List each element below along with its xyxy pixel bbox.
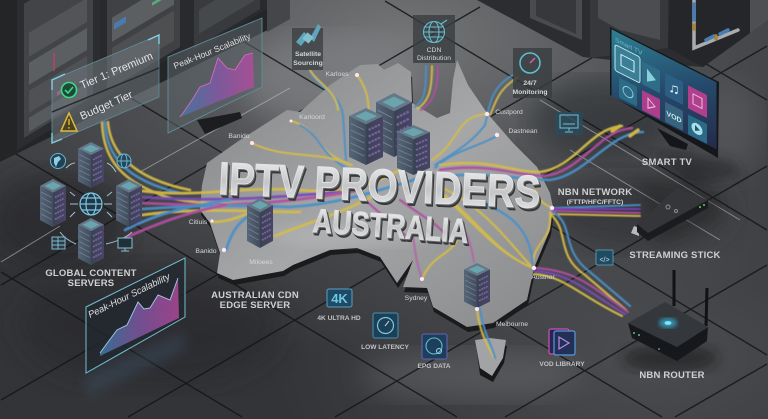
card: satellite sourcing: Satellite: [295, 51, 321, 58]
icon: central globe: [80, 193, 102, 215]
icon: data table: [52, 237, 65, 249]
label: streaming stick: STREAMING STICK: [629, 250, 721, 261]
tier labels: [78, 50, 155, 123]
icon: satellite: [296, 24, 321, 46]
heading: Australian CDN edge server: AUSTRALIAN CDN: [211, 290, 299, 301]
icon: 4K ultra HD: 4K ULTRA HD: [317, 315, 361, 322]
map place names: Austnor: [531, 274, 555, 281]
servers: central cluster: [349, 93, 430, 175]
chart: peak-hour scalability, upper: Peak-Hour Scalability: [172, 31, 253, 71]
streaming stick: [631, 180, 720, 245]
card: 24/7 monitoring: 24/7: [523, 80, 537, 87]
TV screen: ♫: [668, 78, 680, 100]
chart: peak-hour scalability, upper: [168, 18, 262, 134]
icon: EPG data: EPG DATA: [417, 363, 451, 370]
icon: code window: </>: [599, 257, 610, 264]
map place names: Custpord: [495, 109, 523, 116]
icon: small globe: [117, 154, 131, 168]
map place names: Citiuis: [189, 219, 208, 226]
icon: network monitor: [555, 112, 583, 135]
label: NBN network: NBN NETWORK: [558, 187, 632, 198]
map: Australia: [200, 60, 554, 382]
label: smart TV: SMART TV: [642, 157, 693, 168]
tier labels: Budget Tier: [78, 89, 135, 123]
cables: map to smart TV: [440, 126, 643, 180]
label: NBN network: [558, 187, 632, 206]
cables: top icons to servers: [252, 66, 517, 170]
map place names: Karloes: [325, 71, 349, 78]
map place names: Karloord: [299, 114, 325, 121]
heading: global content servers: SERVERS: [68, 278, 114, 289]
title: AUSTRALIA: [311, 202, 470, 251]
data cables: [102, 66, 643, 358]
card: satellite sourcing: Sourcing: [293, 60, 323, 67]
global content servers cluster: [40, 142, 142, 265]
map place names: Melbourne: [496, 321, 528, 328]
card: 24/7 monitoring: [512, 48, 552, 98]
cables: NBN node to streaming stick: [533, 190, 640, 268]
heading: global content servers: GLOBAL CONTENT: [45, 268, 137, 279]
icon: EPG data: [417, 334, 451, 370]
smart TV: [610, 27, 745, 185]
icon: code window: [596, 250, 613, 265]
map place names: Banido: [195, 248, 217, 255]
icon: arrows: [60, 163, 132, 244]
map place names: Banido: [228, 133, 250, 140]
server: Australian CDN edge: [247, 198, 273, 248]
TV screen: [612, 29, 716, 149]
card: CDN distribution: CDN: [427, 47, 441, 54]
icon: VOD library: VOD LIBRARY: [539, 361, 585, 368]
NBN router: [622, 270, 718, 372]
icon: green check: [62, 82, 76, 98]
cables: global servers across map: [125, 170, 420, 250]
chart: peak-hour scalability, lower: Peak-Hour Scalability: [86, 270, 173, 320]
icon: low latency: LOW LATENCY: [361, 344, 410, 351]
icon: VOD library: [539, 329, 585, 368]
icon: 4K ultra HD: 4K: [331, 291, 348, 306]
card: CDN distribution: [413, 15, 455, 63]
label: NBN router: NBN ROUTER: [639, 370, 705, 381]
card: 24/7 monitoring: Monitoring: [512, 89, 548, 96]
map place names: Dastnean: [508, 128, 538, 135]
icon: warning: [61, 113, 77, 131]
map place names: Miloees: [249, 259, 273, 266]
icon: pipes: [694, 0, 738, 48]
chart: peak-hour scalability, lower: [86, 258, 185, 398]
icon: 4K ultra HD: [317, 289, 361, 322]
panel: service tiers: [52, 35, 159, 143]
cables: tier panel to centre: [102, 122, 260, 204]
server racks: top left: [0, 0, 290, 162]
map place names: [189, 71, 555, 328]
icon: earth: [50, 154, 66, 168]
TV screen: VOD: [666, 109, 682, 125]
TV screen: Smart TV: [615, 37, 643, 57]
heading: Australian CDN edge server: EDGE SERVER: [220, 300, 290, 311]
Tasmania: [475, 338, 507, 382]
tier labels: Tier 1: Premium: [78, 50, 155, 92]
card: satellite sourcing: [292, 24, 323, 70]
icon: low latency: [361, 313, 410, 351]
map place names: Sydney: [405, 295, 428, 302]
heading: global content servers: [45, 268, 137, 289]
cables: network to router: [534, 212, 630, 316]
title: [218, 152, 542, 251]
label: NBN network: (FTTP/HFC/FFTC): [567, 199, 623, 206]
server: Melbourne: [464, 263, 490, 308]
card: CDN distribution: Distribution: [417, 55, 451, 62]
title: IPTV PROVIDERS: [218, 152, 542, 218]
icon: monitor: [118, 238, 132, 251]
heading: Australian CDN edge server: [211, 290, 299, 311]
cables: centre to south coast: [360, 185, 533, 358]
server racks: top right: [477, 0, 768, 67]
map nodes: [210, 73, 554, 311]
